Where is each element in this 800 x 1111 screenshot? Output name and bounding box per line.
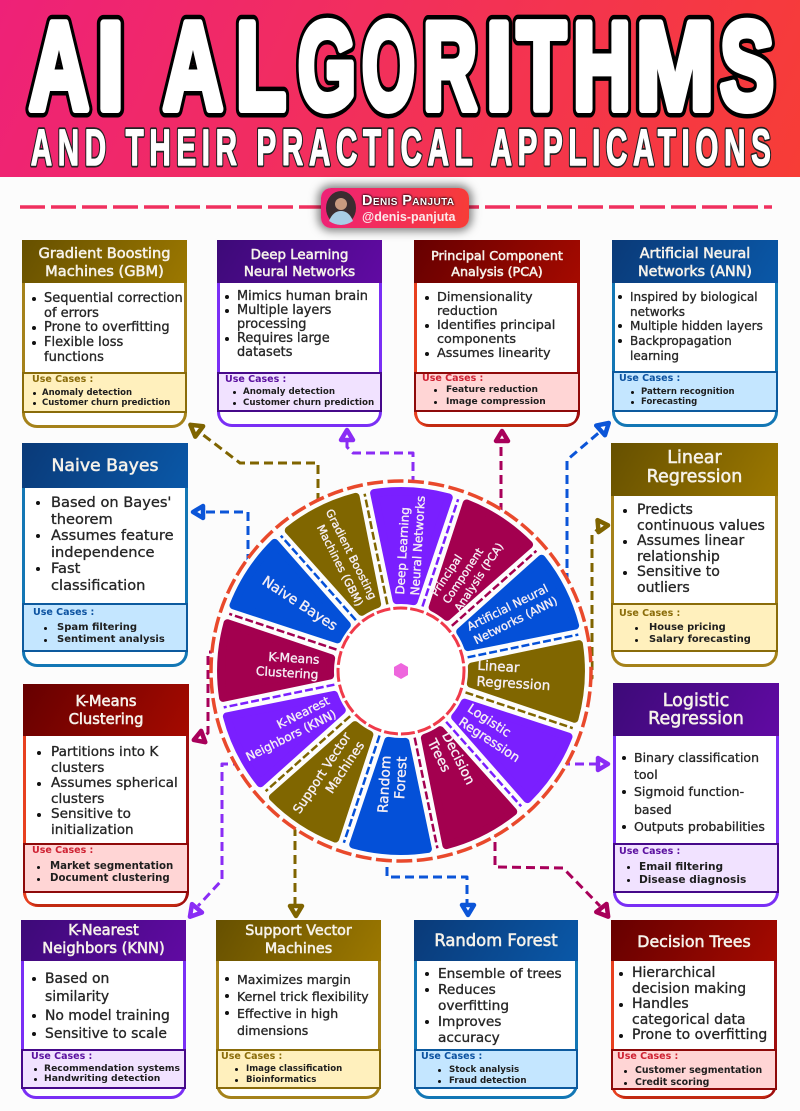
key points: functions xyxy=(44,350,104,365)
title text: I xyxy=(97,0,124,136)
title text: L xyxy=(236,0,286,136)
title text: I xyxy=(486,0,512,136)
title text xyxy=(25,0,776,176)
wheel labels: K-Nearest xyxy=(274,693,332,732)
heading: Clustering xyxy=(69,711,143,728)
heading: Logistic xyxy=(663,691,729,711)
key points: Sequential correction xyxy=(44,291,183,306)
use cases: Handwriting detection xyxy=(44,1073,160,1084)
title text: AND THEIR PRACTICAL APPLICATIONS xyxy=(31,119,771,176)
title text: R xyxy=(423,0,477,136)
panel: KNN xyxy=(21,920,186,1099)
title text: A xyxy=(29,0,89,136)
arrow: wheel to Random Forest xyxy=(387,853,474,915)
use cases: Use Cases : xyxy=(619,608,680,619)
key points: Handles xyxy=(632,996,689,1012)
key points: classification xyxy=(51,576,145,594)
wheel labels: Analysis (PCA) xyxy=(452,541,506,614)
use cases: House pricing xyxy=(649,622,726,633)
wheel labels: Regression xyxy=(456,715,522,766)
title text: H xyxy=(573,0,631,136)
heading xyxy=(611,920,777,961)
use cases xyxy=(414,1049,578,1089)
key points: datasets xyxy=(237,345,292,360)
title text: L xyxy=(236,0,286,136)
wheel labels: Decision xyxy=(438,730,477,787)
title text: AND THEIR PRACTICAL APPLICATIONS xyxy=(31,119,771,176)
key points xyxy=(36,494,174,594)
use cases: Use Cases : xyxy=(225,374,286,385)
title text: G xyxy=(298,0,356,136)
arrow: wheel to Naive Bayes xyxy=(193,506,248,563)
key points: networks xyxy=(630,305,685,319)
key points: Backpropagation xyxy=(630,334,732,348)
key points: Sigmoid function- xyxy=(634,784,744,799)
title text: M xyxy=(636,0,714,136)
title text: A xyxy=(163,0,223,136)
use cases: Email filtering xyxy=(639,861,723,873)
arrow: wheel to KNN xyxy=(185,764,242,921)
key points xyxy=(32,291,183,365)
title text: G xyxy=(298,0,356,136)
heading: Gradient Boosting xyxy=(39,245,170,262)
wheel labels: Logistic xyxy=(464,701,513,741)
wheel labels: Regression xyxy=(476,674,551,694)
use cases xyxy=(414,372,580,412)
key points: categorical data xyxy=(632,1012,746,1028)
key points: Prone to overfitting xyxy=(632,1027,767,1043)
key points: Fast xyxy=(51,560,80,577)
key points xyxy=(619,965,767,1043)
key points: learning xyxy=(630,349,679,363)
use cases xyxy=(611,1049,777,1090)
use cases: Bioinformatics xyxy=(246,1075,316,1085)
key points: Flexible loss xyxy=(44,335,123,350)
key points: outliers xyxy=(637,580,690,596)
wheel labels: Component xyxy=(440,545,486,606)
arrow: wheel to Linear Regression xyxy=(586,519,609,678)
heading xyxy=(611,443,778,496)
title text: I xyxy=(486,0,512,136)
use cases: Use Cases : xyxy=(32,374,93,385)
heading: Random Forest xyxy=(434,931,558,950)
key points: clusters xyxy=(51,760,104,776)
key points: initialization xyxy=(51,822,134,838)
use cases: Recommendation systems xyxy=(44,1063,180,1074)
key points: decision making xyxy=(632,980,746,996)
key points: Sensitive to xyxy=(51,806,131,822)
wheel labels: Linear xyxy=(477,658,520,676)
use cases: Spam filtering xyxy=(57,622,137,633)
use cases: Image compression xyxy=(446,396,546,406)
use cases xyxy=(611,603,778,652)
heading: Artificial Neural xyxy=(640,246,750,262)
heading xyxy=(613,683,779,736)
arrow: wheel to Logistic Regression xyxy=(561,758,608,770)
use cases: Anomaly detection xyxy=(243,387,335,397)
heading: Regression xyxy=(647,467,742,487)
key points: Based on xyxy=(45,971,109,987)
use cases: Image classification xyxy=(246,1064,342,1074)
arrow: wheel to Decision Trees xyxy=(495,828,613,921)
key points: similarity xyxy=(45,989,109,1005)
use cases: Disease diagnosis xyxy=(639,874,746,886)
key points xyxy=(622,750,765,834)
use cases: Use Cases : xyxy=(617,1051,678,1062)
use cases: Use Cases : xyxy=(221,1051,282,1062)
key points: Assumes linear xyxy=(637,533,744,549)
wheel labels: Naive Bayes xyxy=(259,573,340,634)
heading xyxy=(217,240,382,283)
panel: ANN xyxy=(612,240,778,427)
heading: Decision Trees xyxy=(637,932,751,951)
heading xyxy=(22,443,188,488)
wheel labels: Forest xyxy=(392,756,411,800)
key points: Assumes spherical xyxy=(51,775,178,791)
key points: Multiple layers xyxy=(237,303,331,318)
heading: Analysis (PCA) xyxy=(451,264,543,279)
use cases xyxy=(22,372,187,413)
key points: Sensitive to xyxy=(637,564,720,580)
panel: Linear Regression xyxy=(611,443,778,667)
panel: Decision Trees xyxy=(611,920,777,1099)
key points xyxy=(37,744,178,838)
key points: tool xyxy=(634,767,658,782)
use cases: Feature reduction xyxy=(446,385,538,395)
key points: Prone to overfitting xyxy=(44,320,170,335)
wheel labels: Machines xyxy=(322,738,367,796)
use cases: Salary forecasting xyxy=(649,634,751,645)
heading: Machines xyxy=(265,940,332,956)
use cases xyxy=(21,1049,186,1089)
key points: Effective in high xyxy=(237,1006,338,1021)
title text: O xyxy=(362,0,415,136)
key points: of errors xyxy=(44,306,99,321)
arrow: wheel to SVM xyxy=(290,827,302,916)
key points: Partitions into K xyxy=(51,744,158,760)
title text: A xyxy=(163,0,223,136)
key points: Binary classification xyxy=(634,750,759,765)
key points: Dimensionality xyxy=(437,290,533,305)
heading: Naive Bayes xyxy=(52,456,158,476)
key points: Reduces xyxy=(438,982,496,998)
arrow: wheel to PCA xyxy=(496,431,508,512)
arrow: wheel to ANN xyxy=(567,418,613,582)
key points: No model training xyxy=(45,1008,170,1024)
key points: components xyxy=(437,332,516,347)
use cases: Use Cases : xyxy=(33,607,94,618)
panel: Deep Learning xyxy=(217,240,382,427)
wheel labels: Principal xyxy=(428,552,465,598)
key points: accuracy xyxy=(438,1030,500,1046)
heading: Networks (ANN) xyxy=(638,264,752,280)
key points xyxy=(623,502,765,596)
arrow: wheel to Deep Learning xyxy=(341,430,413,485)
title text: T xyxy=(517,0,566,136)
key points: Mimics human brain xyxy=(237,289,368,304)
heading: Deep Learning xyxy=(251,248,348,263)
key points: dimensions xyxy=(237,1023,308,1038)
panel: SVM xyxy=(216,920,381,1099)
title text: H xyxy=(573,0,631,136)
wheel labels: Random xyxy=(375,755,395,814)
use cases: Forecasting xyxy=(641,397,697,407)
panel: Random Forest xyxy=(414,920,578,1099)
key points: Multiple hidden layers xyxy=(630,319,763,333)
use cases: Document clustering xyxy=(50,873,170,884)
key points: clusters xyxy=(51,790,104,806)
wheel labels: Trees xyxy=(423,736,453,775)
use cases xyxy=(216,1049,381,1089)
panel: GBM xyxy=(22,240,187,428)
use cases: Use Cases : xyxy=(31,1051,92,1062)
wheel labels: Neural Networks xyxy=(408,495,428,596)
avatar xyxy=(326,191,356,225)
wheel labels: Artificial Neural xyxy=(465,581,550,634)
panel: PCA xyxy=(414,240,580,427)
heading xyxy=(22,240,187,283)
title text: A xyxy=(29,0,89,136)
key points: Inspired by biological xyxy=(630,290,758,304)
use cases: Use Cases : xyxy=(619,373,680,384)
key points xyxy=(225,972,369,1038)
key points: Hierarchical xyxy=(632,965,715,981)
author badge xyxy=(321,188,469,228)
key points: overfitting xyxy=(438,998,509,1014)
key points: Sensitive to scale xyxy=(45,1026,167,1042)
key points: theorem xyxy=(51,510,113,528)
heading xyxy=(21,920,186,961)
key points: Requires large xyxy=(237,331,330,346)
title text: R xyxy=(423,0,477,136)
key points xyxy=(425,966,562,1046)
use cases: Market segmentation xyxy=(50,861,173,872)
wheel labels: Support Vector xyxy=(290,729,354,816)
heading xyxy=(216,920,381,961)
heading: Linear xyxy=(667,448,722,468)
key points: Ensemble of trees xyxy=(438,966,562,982)
key points xyxy=(425,290,555,361)
heading: Regression xyxy=(648,709,744,729)
panel: Naive Bayes xyxy=(22,443,188,667)
wheel labels xyxy=(237,494,560,825)
panel: K-Means xyxy=(23,684,189,907)
heading xyxy=(414,920,578,961)
title text: O xyxy=(362,0,415,136)
wheel segments xyxy=(219,489,583,853)
key points: Improves xyxy=(438,1014,501,1030)
use cases xyxy=(217,372,382,412)
use cases: Customer churn prediction xyxy=(42,398,170,408)
heading: K-Means xyxy=(75,693,137,710)
use cases xyxy=(612,371,778,412)
key points: Assumes feature xyxy=(51,527,174,544)
use cases: Customer churn prediction xyxy=(243,398,374,408)
use cases: Use Cases : xyxy=(32,845,93,856)
key points: continuous values xyxy=(637,518,765,534)
author name: Denis Panjuta xyxy=(362,193,455,209)
key points: independence xyxy=(51,544,155,560)
panel: Logistic Regression xyxy=(613,683,779,907)
use cases: Sentiment analysis xyxy=(57,634,165,645)
title text: M xyxy=(636,0,714,136)
key points xyxy=(32,971,170,1042)
wheel labels: Networks (ANN) xyxy=(471,593,560,647)
wheel labels: Machines (GBM) xyxy=(314,523,366,608)
key points: Kernel trick flexibility xyxy=(237,989,369,1004)
heading: Neural Networks xyxy=(244,265,355,280)
key points: Maximizes margin xyxy=(237,972,351,987)
use cases: Credit scoring xyxy=(635,1077,709,1088)
use cases xyxy=(613,843,779,893)
heading: Support Vector xyxy=(245,923,352,939)
heading xyxy=(23,684,189,736)
wheel labels: Neighbors (KNN) xyxy=(244,707,339,764)
wheel labels: K-Means xyxy=(268,650,320,667)
key points: relationship xyxy=(637,548,720,564)
center hexagon xyxy=(394,663,408,679)
heading xyxy=(612,240,778,283)
key points: based xyxy=(634,802,672,817)
use cases: Pattern recognition xyxy=(641,387,735,397)
wheel labels: Clustering xyxy=(255,664,319,682)
use cases: Stock analysis xyxy=(449,1065,519,1075)
key points xyxy=(225,289,368,360)
use cases: Use Cases : xyxy=(619,846,680,857)
heading: Machines (GBM) xyxy=(45,263,164,280)
key points: Predicts xyxy=(637,502,693,518)
wheel labels: Deep Learning xyxy=(393,507,412,595)
heading xyxy=(414,240,580,283)
arrow: wheel to GBM xyxy=(186,420,318,502)
key points: processing xyxy=(237,317,306,332)
title text: I xyxy=(97,0,124,136)
header banner xyxy=(0,0,800,177)
use cases xyxy=(22,603,188,652)
arrow: wheel to K-Means xyxy=(192,652,218,746)
heading: Principal Component xyxy=(431,248,563,263)
use cases: Use Cases : xyxy=(422,373,483,384)
use cases: Use Cases : xyxy=(421,1051,482,1062)
use cases: Customer segmentation xyxy=(635,1065,762,1076)
heading: Neighbors (KNN) xyxy=(42,940,165,957)
use cases xyxy=(23,843,189,893)
title text: T xyxy=(517,0,566,136)
wheel chart xyxy=(211,481,591,861)
heading: K-Nearest xyxy=(68,922,139,939)
key points: Based on Bayes' xyxy=(51,494,171,511)
key points: Outputs probabilities xyxy=(634,819,765,834)
key points xyxy=(618,290,763,363)
use cases: Fraud detection xyxy=(449,1076,527,1086)
key points: Identifies principal xyxy=(437,318,555,333)
key points: reduction xyxy=(437,304,498,319)
key points: Assumes linearity xyxy=(437,346,551,361)
use cases: Anomaly detection xyxy=(42,388,132,398)
wheel labels: Gradient Boosting xyxy=(323,507,379,602)
author handle: @denis-panjuta xyxy=(362,210,455,224)
